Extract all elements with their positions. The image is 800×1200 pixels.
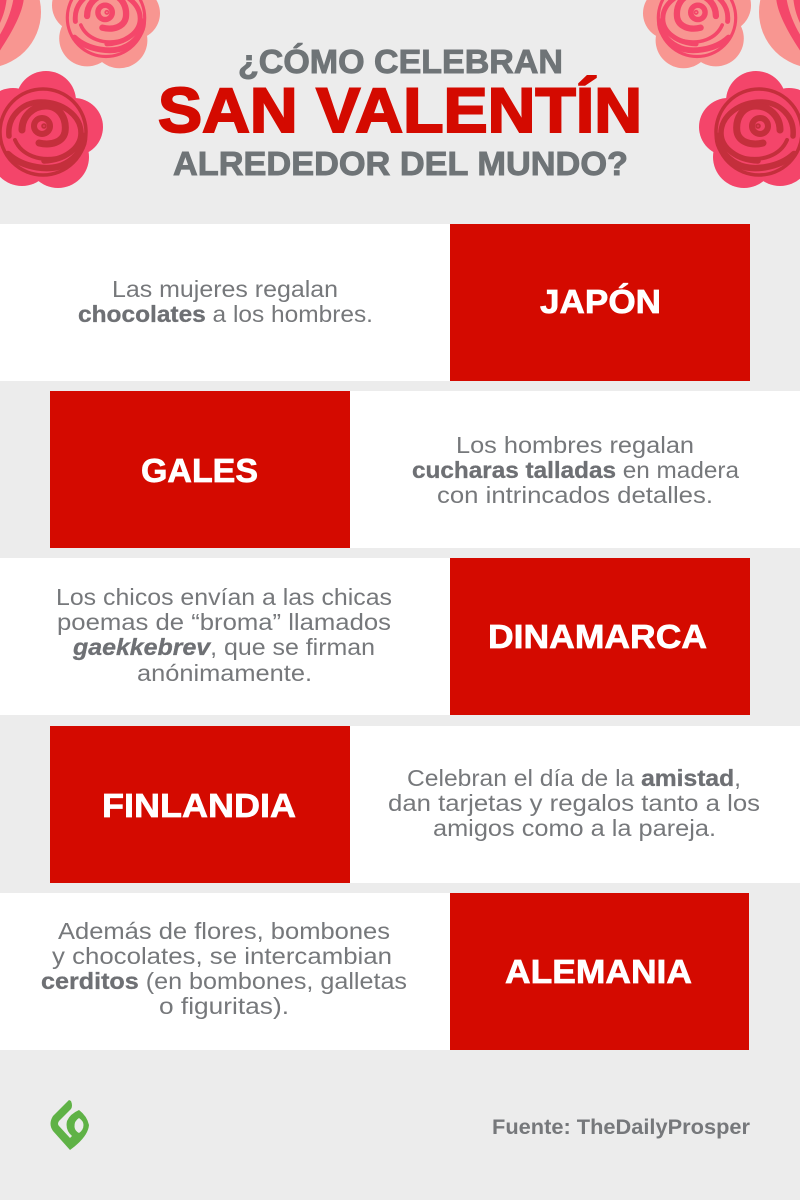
description: Japón: Las mujeres regalan (112, 276, 338, 302)
rose: top right small (643, 0, 751, 68)
title: SAN VALENTÍN (158, 76, 642, 146)
description: Gales: Los hombres regalan (456, 432, 694, 458)
panel: Japón (0, 224, 750, 381)
description: Japón (78, 276, 373, 327)
description: Finlandia: amigos como a la pareja. (433, 815, 716, 841)
panel: Dinamarca (0, 558, 750, 715)
description: Gales: cucharas talladas en madera (412, 457, 739, 483)
description: Alemania: cerditos (en bombones, galletas (41, 968, 407, 994)
description: Dinamarca: anónimamente. (137, 660, 312, 686)
description: Dinamarca (56, 584, 392, 686)
panel: Gales (50, 391, 800, 548)
label: Dinamarca: DINAMARCA (488, 618, 707, 655)
label: Japón: JAPÓN (540, 283, 661, 320)
label: Gales: GALES (141, 452, 258, 489)
label: Alemania: ALEMANIA (505, 953, 692, 990)
rose: top left small (52, 0, 160, 68)
rose: bottom left (0, 71, 103, 188)
description: Japón: chocolates a los hombres. (78, 301, 373, 327)
description: Alemania (41, 918, 407, 1019)
description: Finlandia: dan tarjetas y regalos tanto a los (388, 790, 760, 816)
description: Finlandia (388, 765, 760, 841)
rose: bottom right (699, 71, 800, 188)
source note: Fuente: TheDailyProsper (492, 1116, 750, 1139)
description: Gales: con intrincados detalles. (437, 482, 713, 508)
description: Dinamarca: poemas de “broma” llamados (57, 609, 391, 635)
description: Gales (412, 432, 739, 508)
description: Dinamarca: Los chicos envían a las chicas (56, 584, 392, 610)
title (158, 43, 642, 182)
label: Finlandia: FINLANDIA (102, 787, 296, 824)
description: Dinamarca: gaekkebrev , que se firman (72, 634, 375, 660)
title: ALREDEDOR DEL MUNDO? (173, 145, 628, 182)
description: Alemania: o figuritas). (159, 993, 289, 1019)
description: Finlandia: Celebran el día de la amistad , (407, 765, 741, 791)
icon: green leaf logo (50, 1100, 89, 1150)
rose: top right partial (759, 0, 800, 68)
panel: Finlandia (50, 726, 800, 883)
description: Alemania: y chocolates, se intercambian (52, 943, 392, 969)
panel: Alemania (0, 893, 749, 1050)
description: Alemania: Además de flores, bombones (58, 918, 390, 944)
title: ¿CÓMO CELEBRAN (238, 43, 563, 80)
rose: top left partial (0, 0, 41, 68)
